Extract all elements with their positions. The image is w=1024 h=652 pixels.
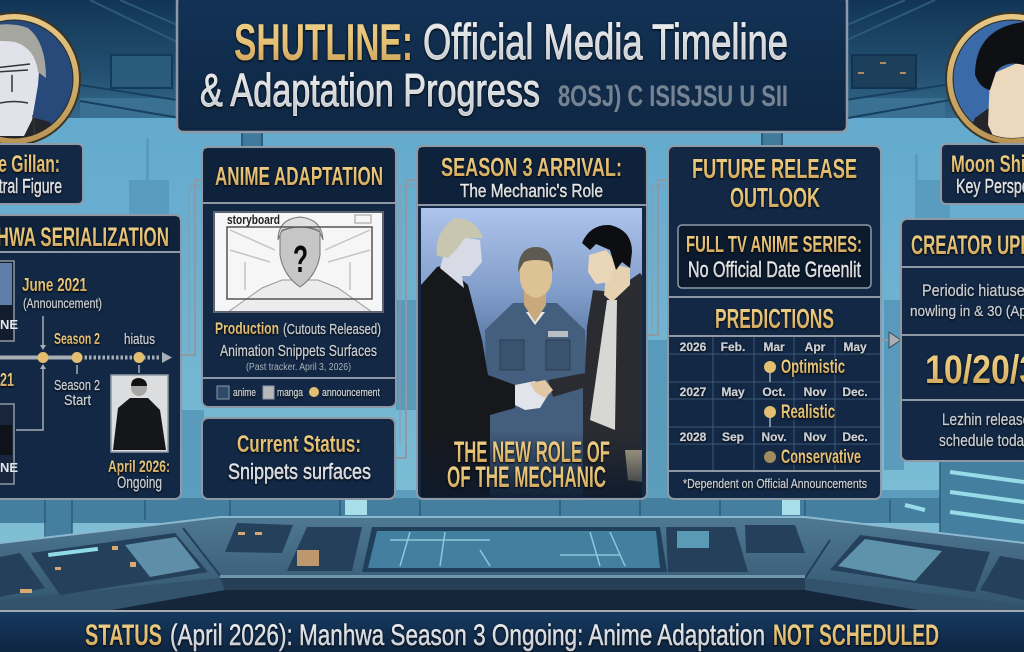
production status text: Production <box>215 319 279 338</box>
thumbnail: manhwa cover upper <box>0 261 18 341</box>
legend: anime <box>233 387 256 399</box>
arrow: future outlook to creator updates <box>889 332 901 348</box>
heading: anime adaptation: ANIME ADAPTATION <box>215 161 383 191</box>
caption: the new role of the mechanic: OF THE MECHANIC <box>447 461 606 494</box>
predictions table: Apr <box>805 340 826 354</box>
milestone: season 2: Start <box>64 392 92 409</box>
label: left character <box>0 144 83 204</box>
scenario: optimistic: Optimistic <box>781 357 845 378</box>
panel: anime adaptation <box>202 147 396 407</box>
legend: manga <box>277 387 304 399</box>
callout: full tv anime series: FULL TV ANIME SERIES: <box>686 231 862 257</box>
production status text: Animation Snippets Surfaces <box>220 343 377 360</box>
milestone: April 2026 ongoing <box>108 457 170 492</box>
title: line one: SHUTLINE: <box>234 14 413 72</box>
thumbnail: manhwa cover upper: NE <box>0 317 18 332</box>
label: right character <box>941 144 1024 204</box>
mechanic figure <box>485 247 590 497</box>
predictions table: Nov. <box>761 430 787 444</box>
storyboard illustration <box>214 212 383 312</box>
storyboard illustration: ? <box>293 239 308 281</box>
caption: the new role of the mechanic: THE NEW ROLE OF <box>454 436 610 469</box>
left figure in black coat <box>421 218 515 497</box>
milestone: season 2: 21 <box>0 370 14 390</box>
thumbnail: April 2026 character <box>111 375 168 452</box>
panel: season 3 arrival <box>417 146 647 499</box>
thumbnail: manhwa cover lower: NE <box>0 460 18 475</box>
portrait: right character <box>946 13 1024 145</box>
illustration: three characters shaking hands <box>421 208 645 497</box>
production status text <box>215 319 381 373</box>
predictions table: Nov <box>804 385 827 399</box>
title panel: 8OSJ) C ISISJSU U SII <box>558 80 788 113</box>
heading: future release outlook: OUTLOOK <box>730 182 820 213</box>
connectors between panels <box>181 132 893 458</box>
status bar <box>0 611 1024 652</box>
handshake <box>515 381 548 410</box>
panel: manhwa serialization <box>0 215 181 499</box>
legend: announcement <box>322 387 380 399</box>
scenario: optimistic <box>764 357 845 378</box>
predictions table: Nov <box>804 430 827 444</box>
storyboard illustration: storyboard <box>227 212 280 227</box>
lezhin note <box>939 410 1024 450</box>
heading: season 3 arrival: SEASON 3 ARRIVAL: <box>441 152 622 182</box>
predictions table: Sep <box>722 430 744 444</box>
predictions table: Mar <box>763 340 785 354</box>
production status text: (Past tracker. April 3, 2026) <box>246 362 351 373</box>
panel: current status: Snippets surfaces <box>228 459 371 484</box>
scenario: realistic <box>764 402 835 423</box>
heading: future release outlook: FUTURE RELEASE <box>692 153 857 184</box>
scenario: realistic: Realistic <box>781 402 835 423</box>
title panel: & Adaptation Progress <box>200 64 540 116</box>
milestone: April 2026 ongoing: Ongoing <box>117 473 162 492</box>
heading: future release outlook <box>692 153 857 213</box>
predictions table: 2028 <box>680 430 707 444</box>
title panel <box>177 0 847 132</box>
predictions table: May <box>721 385 745 399</box>
predictions table <box>669 337 880 470</box>
milestone: June 2021 announcement: June 2021 <box>22 275 87 295</box>
status bar: STATUS <box>85 619 162 652</box>
milestone: season 2: hiatus <box>124 331 155 348</box>
milestone: season 2: Season 2 <box>54 377 100 394</box>
timeline axis <box>0 316 172 430</box>
panel: season 3 arrival: The Mechanic's Role <box>460 181 603 201</box>
predictions table: Oct. <box>762 385 786 399</box>
predictions table: Dec. <box>842 430 868 444</box>
caption: the new role of the mechanic <box>447 436 610 494</box>
control console <box>0 517 1024 612</box>
milestone: season 2 <box>0 331 155 409</box>
panel: creator updates <box>901 219 1024 461</box>
right figure in black jacket <box>548 225 645 497</box>
milestone: April 2026 ongoing: April 2026: <box>108 457 170 476</box>
predictions table: Feb. <box>721 340 745 354</box>
panel: current status: Current Status: <box>237 431 361 458</box>
callout: full tv anime series: No Official Date Greenlit <box>688 257 861 282</box>
milestone: June 2021 announcement <box>22 275 102 311</box>
panel: future release outlook <box>668 146 881 499</box>
predictions table: 2026 <box>680 340 707 354</box>
panel: current status <box>202 418 395 499</box>
scenario: conservative: Conservative <box>781 447 861 468</box>
predictions table: Dec. <box>842 385 868 399</box>
status bar: (April 2026): Manhwa Season 3 Ongoing: Anime Adaptation <box>170 619 765 652</box>
legend <box>217 386 380 399</box>
title panel: Official Media Timeline <box>423 14 788 70</box>
scenario: conservative <box>764 447 861 468</box>
predictions table: 2027 <box>680 385 707 399</box>
milestone: season 2: Season 2 <box>54 331 100 348</box>
hiatus note <box>910 281 1024 320</box>
portrait: left character <box>0 13 80 150</box>
predictions table: May <box>843 340 867 354</box>
callout: full tv anime series <box>678 225 871 288</box>
thumbnail: manhwa cover lower <box>0 404 18 484</box>
milestone: June 2021 announcement: (Announcement) <box>23 295 102 311</box>
heading: predictions: PREDICTIONS <box>715 303 834 334</box>
production status text: (Cutouts Released) <box>283 321 381 338</box>
status bar: NOT SCHEDULED <box>773 619 939 652</box>
footnote: *Dependent on Official Announcements <box>683 476 867 491</box>
